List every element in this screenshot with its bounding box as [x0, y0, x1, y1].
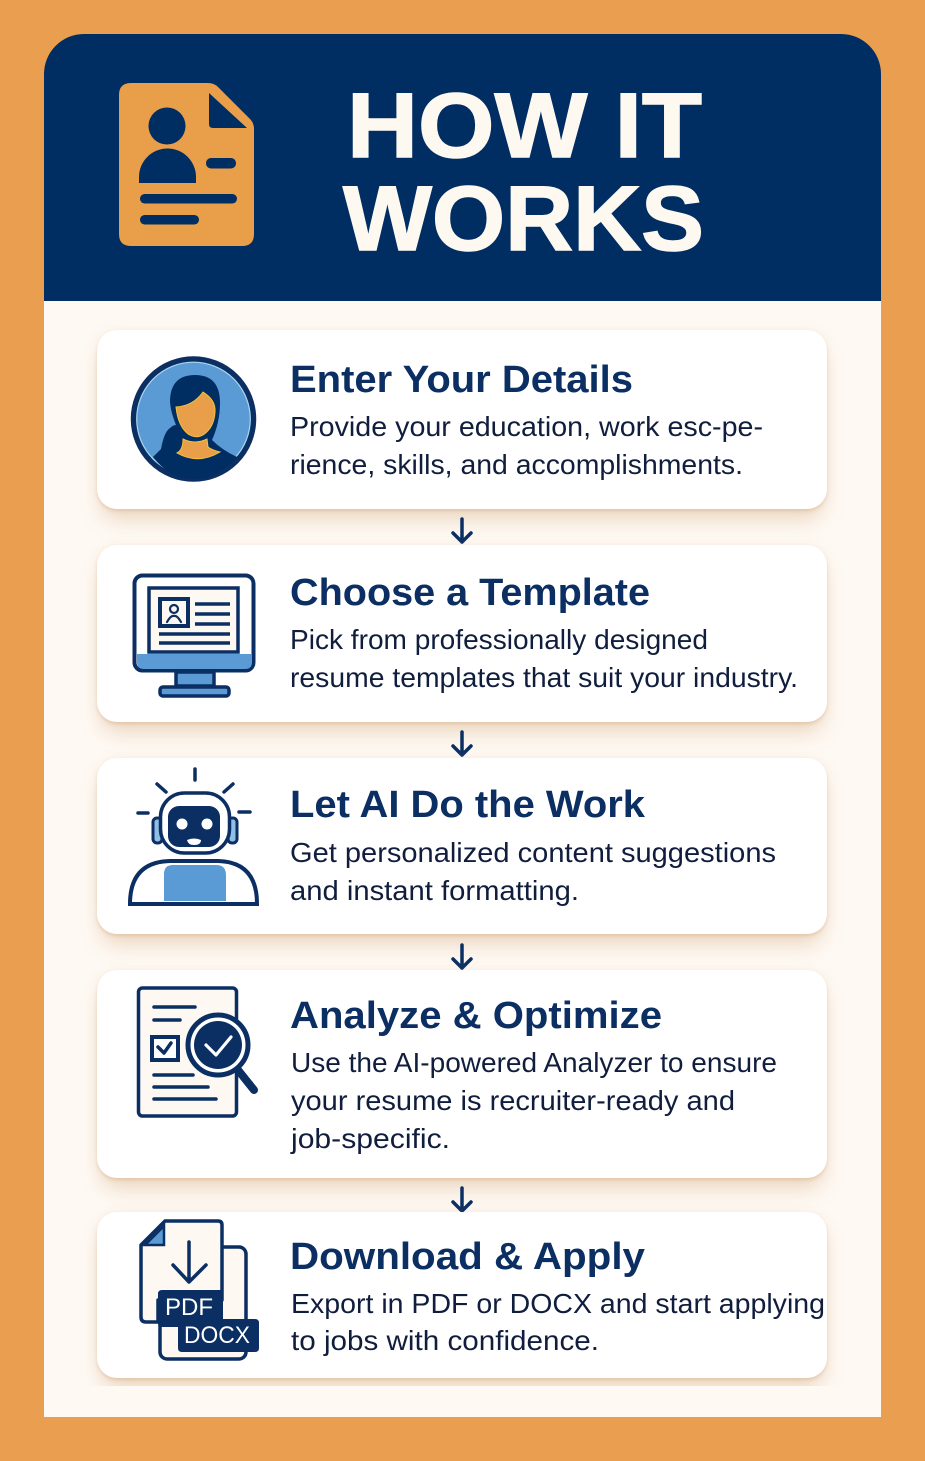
- step 5 text: Export in PDF or DOCX and start applying: [291, 1288, 825, 1319]
- step 5 text: [290, 1236, 825, 1356]
- step 3 text: Let AI Do the Work: [290, 784, 646, 826]
- step 1 text: rience, skills, and accomplishments.: [290, 449, 743, 480]
- title: [342, 75, 704, 270]
- step 4 text: Analyze & Optimize: [290, 995, 662, 1037]
- step 3 text: Get personalized content suggestions: [290, 837, 776, 868]
- arrow 1: [451, 517, 473, 544]
- step 3 text: [290, 784, 776, 906]
- bottom strip of panel: [44, 1386, 881, 1417]
- icon: PDF and DOCX files: [139, 1219, 259, 1361]
- step 5 text: Download & Apply: [290, 1236, 645, 1278]
- step 1 text: [290, 359, 763, 480]
- step 1 text: Provide your education, work esc-pe-: [290, 411, 763, 442]
- step 4 text: job-specific.: [290, 1123, 450, 1154]
- step 1 text: Enter Your Details: [290, 359, 633, 401]
- arrow 4: [451, 1186, 473, 1212]
- step 5 card: download and apply: [97, 1212, 827, 1378]
- step 2 text: resume templates that suit your industry.: [290, 662, 798, 693]
- step 2 text: Pick from professionally designed: [290, 624, 708, 655]
- icon: resume document: [119, 83, 254, 246]
- icon: monitor with resume: [132, 574, 256, 698]
- step 4 card: analyze and optimize: [97, 970, 827, 1178]
- icon: PDF and DOCX files: DOCX: [184, 1322, 250, 1349]
- step 2 text: [290, 572, 798, 693]
- header banner: [44, 34, 881, 301]
- step 3 text: and instant formatting.: [290, 875, 579, 906]
- icon: robot: [128, 767, 259, 906]
- step 2 card: choose a template: [97, 545, 827, 722]
- step 3 card: let AI do the work: [97, 758, 827, 934]
- step 2 text: Choose a Template: [290, 572, 650, 614]
- step 4 text: your resume is recruiter-ready and: [291, 1085, 735, 1116]
- icon: person avatar: [130, 356, 256, 482]
- title: WORKS: [343, 168, 704, 270]
- cream content panel: [44, 280, 881, 1386]
- icon: document with magnifier: [136, 986, 258, 1118]
- step 4 text: [290, 995, 777, 1154]
- step 4 text: Use the AI-powered Analyzer to ensure: [291, 1047, 777, 1078]
- icon: PDF and DOCX files: PDF: [165, 1294, 213, 1321]
- step 5 text: to jobs with confidence.: [291, 1325, 599, 1356]
- title: HOW IT: [347, 75, 702, 177]
- arrow 3: [451, 943, 473, 970]
- step 1 card: enter your details: [97, 330, 827, 509]
- arrow 2: [451, 730, 473, 757]
